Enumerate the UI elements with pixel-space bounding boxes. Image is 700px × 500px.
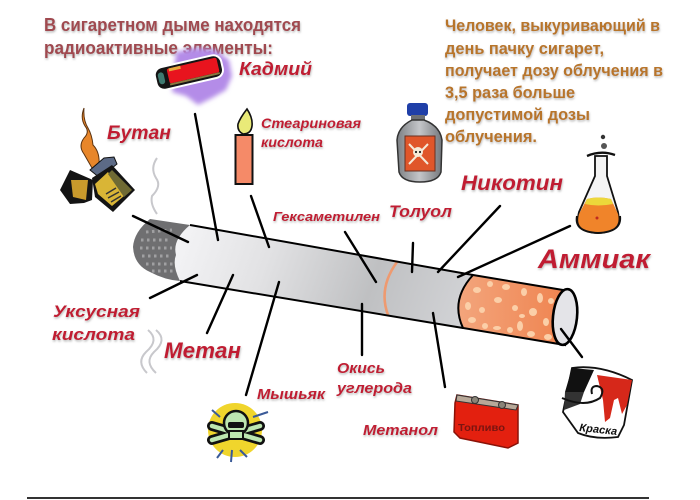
chemical labels: Гексаметилен	[273, 209, 380, 224]
icon: cadmium battery	[152, 48, 232, 105]
icon: stearic candle	[236, 109, 252, 184]
text block: radiation dose: получает дозу облучения в	[445, 62, 663, 80]
icon: butane lighters	[60, 108, 135, 212]
icon: arsenic skull and crossbones	[208, 403, 268, 462]
filter end opening	[550, 288, 580, 346]
chemical labels: Аммиак	[537, 244, 651, 274]
text block: radiation dose: допустимой дозы	[445, 106, 590, 124]
text block: radiation dose: Человек, выкуривающий в	[445, 17, 660, 35]
chemical labels: кислота	[261, 134, 323, 150]
smoke wisp: upper	[152, 158, 158, 214]
chemical labels: Уксусная	[53, 302, 140, 321]
text block: radiation dose: облучения.	[445, 128, 537, 146]
chemical labels: Метанол	[363, 422, 439, 439]
chemical labels: Окись	[337, 360, 385, 377]
chemical labels: углерода	[336, 380, 412, 397]
icon: methanol fuel can	[454, 395, 518, 448]
text block: radiation dose	[445, 17, 663, 146]
text block: radiation dose: 3,5 раза больше	[445, 84, 575, 102]
cigarette paper body	[175, 225, 473, 328]
chemical labels	[52, 59, 651, 439]
chemical labels: Стеариновая	[261, 115, 361, 131]
chemical labels: Метан	[164, 338, 241, 363]
smoke wisp: lower	[141, 330, 162, 373]
title: radioactive elements	[44, 15, 301, 58]
chemical labels: Никотин	[461, 172, 563, 195]
cigarette outline	[180, 225, 473, 328]
title: radioactive elements: радиоактивные элементы:	[44, 38, 273, 58]
icon: paint can	[562, 367, 632, 438]
text block: radiation dose: день пачку сигарет,	[445, 40, 604, 58]
chemical labels: Кадмий	[239, 59, 312, 79]
icon: ammonia flask	[577, 135, 620, 233]
chemical labels: Бутан	[107, 123, 172, 144]
icon: toluene bottle	[397, 103, 442, 182]
title: radioactive elements: В сигаретном дыме находятся	[44, 15, 301, 35]
chemical labels: кислота	[52, 325, 135, 344]
chemical labels: Толуол	[389, 202, 452, 221]
filter	[458, 275, 565, 345]
fuel can label: Топливо	[458, 423, 505, 434]
leader lines	[133, 114, 582, 395]
chemical labels: Мышьяк	[257, 386, 326, 403]
paint can label: Краска	[579, 422, 618, 438]
cigarette	[133, 219, 580, 346]
ash tip	[133, 219, 190, 281]
orange band	[385, 262, 397, 315]
